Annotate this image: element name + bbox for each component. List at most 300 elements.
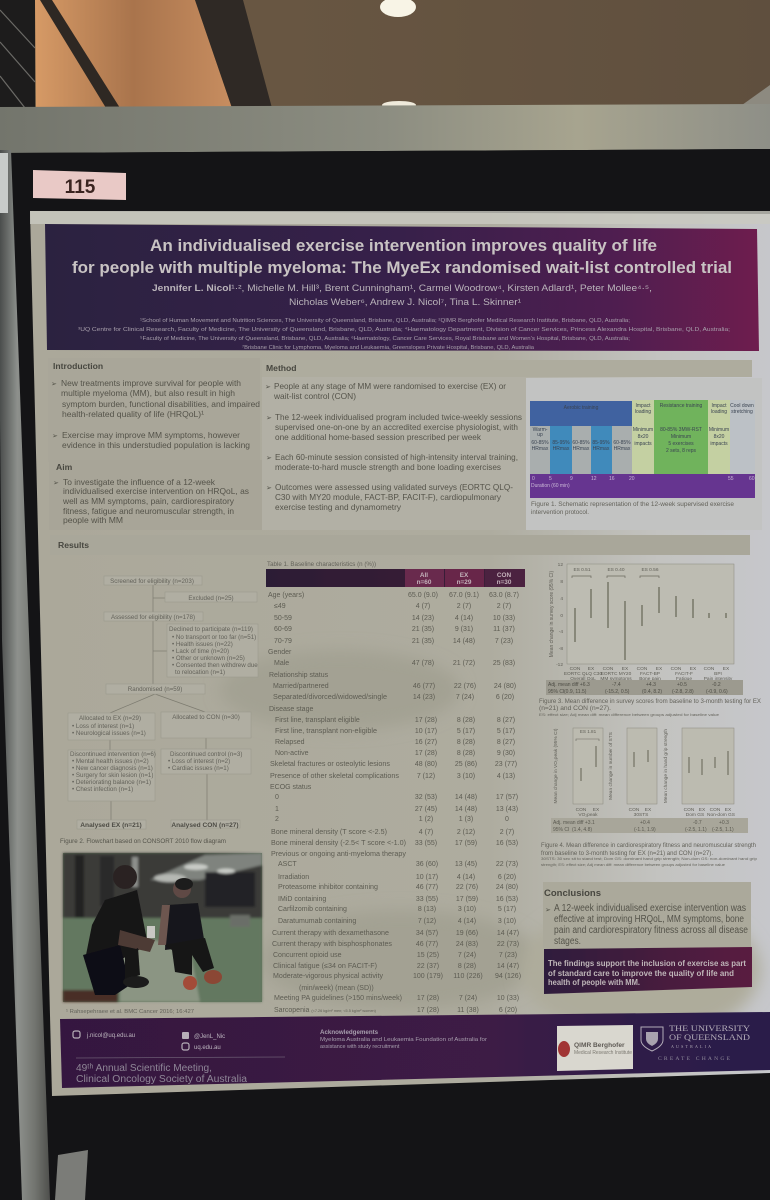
figure 3 caption bbox=[539, 698, 761, 717]
table rows: demographics and disease: Age (years) bbox=[268, 592, 304, 599]
figure 3 adjusted mean table: (0.4, 8.2) bbox=[642, 689, 662, 695]
footer banner bbox=[60, 1012, 770, 1088]
table rows: demographics and disease: Relapsed bbox=[275, 739, 305, 746]
table rows: status and therapy: 24 (83) bbox=[456, 941, 478, 948]
table rows: status and therapy: 15 (25) bbox=[417, 952, 439, 959]
figure 2: CONSORT flowchart: • Neurological issues (n=1) bbox=[72, 730, 146, 737]
aim text: people with MM bbox=[63, 515, 123, 525]
table rows: status and therapy: 11 (38) bbox=[457, 1007, 479, 1014]
chart: VO2 peak: VO₂peak bbox=[578, 812, 598, 818]
table rows: status and therapy: 14 (48) bbox=[455, 794, 477, 801]
table rows: demographics and disease: 25 (86) bbox=[455, 761, 477, 768]
heading: introduction: Introduction bbox=[53, 361, 103, 371]
authors: Nicholas Weber⁶, Andrew J. Nicol⁷, Tina L. Skinner¹ bbox=[289, 297, 521, 307]
icon: twitter bbox=[182, 1032, 189, 1039]
table rows: demographics and disease: Non-active bbox=[275, 750, 309, 757]
table rows: demographics and disease: 8 (28) bbox=[457, 750, 475, 757]
logo: QIMR Berghofer bbox=[557, 1025, 633, 1071]
panel: aim bbox=[49, 460, 262, 530]
table rows: status and therapy: IMiD containing bbox=[278, 896, 326, 903]
introduction text: evidence in this understudied population is lacking bbox=[62, 440, 250, 450]
figure 3: survey score mean change chart: EX bbox=[723, 666, 730, 672]
chart: VO2 peak: EX bbox=[593, 807, 600, 813]
aim text: To investigate the influence of a 12-week bbox=[63, 477, 216, 487]
table rows: status and therapy: 33 (55) bbox=[415, 840, 437, 847]
figure 1: exercise protocol schematic: Duration (60 min) bbox=[531, 483, 570, 489]
introduction text bbox=[51, 378, 260, 450]
method text: The 12-week individualised program included twice-weekly sessions bbox=[275, 412, 522, 422]
table rows: demographics and disease: 5 (17) bbox=[497, 728, 515, 735]
figure 1: exercise protocol schematic: Minimum bbox=[633, 427, 653, 433]
chart: VO2 peak: Mean change in VO₂peak (95% CI) bbox=[553, 728, 559, 803]
figure 3 adjusted mean table: +0.5 bbox=[677, 682, 687, 688]
y-axis labels: 0 bbox=[560, 613, 563, 619]
introduction text: health-related quality of life (HRQoL)¹ bbox=[62, 409, 204, 419]
authors bbox=[152, 283, 652, 307]
figure 2: CONSORT flowchart: • Surgery for skin lesion (n=1) bbox=[72, 772, 153, 779]
figure 2: CONSORT flowchart: Analysed EX (n=21) bbox=[80, 822, 142, 829]
figure 4 adjusted mean table: +0.3 bbox=[719, 820, 729, 826]
acknowledgements bbox=[320, 1029, 487, 1050]
figure 2: CONSORT flowchart: • Cardiac issues (n=1) bbox=[168, 765, 229, 772]
figure 3: survey score mean change chart: CON bbox=[603, 666, 614, 672]
table rows: demographics and disease: 10 (17) bbox=[415, 728, 437, 735]
figure 3: survey score mean change chart: ES 0.56 bbox=[641, 567, 659, 573]
figure 3: survey score mean change chart: EORTC QLQ C30 bbox=[564, 671, 602, 677]
table rows: demographics and disease: First line, transplant non-eligible bbox=[275, 728, 377, 735]
figure 1: exercise protocol schematic: impacts bbox=[634, 441, 652, 447]
figure 1 caption: intervention protocol. bbox=[531, 509, 589, 516]
table rows: demographics and disease: 22 (76) bbox=[454, 683, 476, 690]
table rows: demographics and disease: 47 (78) bbox=[412, 660, 434, 667]
logo: University of Queensland: CREATE CHANGE bbox=[658, 1056, 731, 1062]
figure 3: survey score mean change chart: CON bbox=[637, 666, 648, 672]
table rows: status and therapy: Current therapy with dexamethasone bbox=[272, 930, 389, 937]
table rows: status and therapy: (min/week) (mean (SD)) bbox=[299, 985, 374, 992]
table rows: status and therapy: Carfilzomib containing bbox=[278, 906, 347, 913]
table header row: CON bbox=[497, 572, 511, 579]
panel: conclusions bbox=[543, 882, 751, 948]
table rows: status and therapy: 17 (59) bbox=[456, 896, 478, 903]
chart: hand grip strength: Dom GS bbox=[686, 812, 704, 818]
table rows: demographics and disease: 65.0 (9.0) bbox=[408, 592, 438, 599]
table rows: status and therapy: 8 (28) bbox=[458, 963, 476, 970]
table rows: demographics and disease: ECOG status bbox=[270, 784, 312, 791]
figure 1: exercise protocol schematic: 80-85% 3MW-RST bbox=[660, 427, 702, 433]
table rows: demographics and disease: 8 (28) bbox=[457, 717, 475, 724]
figure 3 caption: (n=21) and CON (n=27). bbox=[539, 705, 611, 712]
title bbox=[72, 236, 732, 277]
figure 1: exercise protocol schematic: Minimum bbox=[671, 434, 691, 440]
figure 3 adjusted mean table bbox=[546, 680, 743, 695]
section heading: results: Results bbox=[58, 540, 89, 550]
table rows: demographics and disease: 16 (27) bbox=[415, 739, 437, 746]
table rows: demographics and disease: 7 (24) bbox=[456, 694, 474, 701]
figure 1: exercise protocol schematic: Warm- bbox=[533, 427, 548, 433]
conclusions text bbox=[545, 903, 748, 947]
table rows: status and therapy: Bone mineral density (-2.5< T score <-1.0) bbox=[271, 840, 406, 847]
figure 1: exercise protocol schematic: 60 bbox=[749, 476, 755, 482]
figure 1: exercise protocol schematic: loading bbox=[711, 409, 727, 415]
table rows: demographics and disease: 6 (20) bbox=[496, 694, 514, 701]
figure 1: exercise protocol schematic: 16 bbox=[609, 476, 615, 482]
method text: ➢ bbox=[265, 384, 271, 391]
contact: twitter: @JenL_Nic bbox=[194, 1034, 225, 1040]
acknowledgements: Myeloma Australia and Leukaemia Foundation of Australia for bbox=[320, 1037, 487, 1043]
figure 1: exercise protocol schematic: 5 bbox=[549, 476, 552, 482]
table header row: n=29 bbox=[457, 579, 472, 586]
table rows: status and therapy: 34 (57) bbox=[416, 930, 438, 937]
table rows: demographics and disease: Male bbox=[274, 660, 289, 667]
figure 2: CONSORT flowchart: Randomised (n=59) bbox=[128, 686, 182, 693]
chart: hand grip strength: CON bbox=[710, 807, 721, 813]
table rows: status and therapy: Clinical fatigue (≤34 on FACIT-F) bbox=[273, 963, 377, 970]
method text: supervised one-on-one by an accredited exercise physiologist, with bbox=[275, 422, 518, 432]
y-axis labels: 12 bbox=[558, 562, 563, 568]
figure 4 caption: 30STS: 30 sec sit to stand test; Dom GS: dominant hand grip strength; Non-dom GS: non-dominant hand grip bbox=[541, 856, 757, 861]
significance brackets bbox=[572, 576, 659, 578]
table rows: demographics and disease: 24 (80) bbox=[494, 683, 516, 690]
table rows: status and therapy: ASCT bbox=[278, 861, 297, 868]
logo: University of Queensland bbox=[641, 1024, 750, 1062]
method text: Each 60-minute session consisted of high-intensity interval training, bbox=[275, 452, 518, 462]
table rows: demographics and disease: ≤49 bbox=[274, 603, 286, 610]
figure 3 caption: ES: effect size; Adj mean diff: mean difference between groups adjusted for baseline value bbox=[539, 713, 719, 717]
figure 4 adjusted mean table: (-2.5, 1.1) bbox=[685, 827, 707, 833]
table rows: status and therapy: 4 (14) bbox=[458, 918, 476, 925]
figure 2: CONSORT flowchart: • Consented then withdrew due bbox=[172, 662, 258, 669]
figure 1: exercise protocol schematic: HRmax bbox=[532, 446, 549, 452]
table rows: demographics and disease bbox=[268, 592, 519, 791]
figure 1: exercise protocol schematic: 0 bbox=[532, 476, 535, 482]
method text: ➢ bbox=[266, 415, 272, 422]
figure 2: CONSORT flowchart: to relocation (n=1) bbox=[175, 669, 225, 676]
table rows: status and therapy: 22 (76) bbox=[456, 884, 478, 891]
chart: sit to stand: Mean change in number of STS bbox=[608, 732, 614, 800]
table rows: demographics and disease: 4 (7) bbox=[416, 603, 430, 610]
table rows: demographics and disease: 60-69 bbox=[274, 626, 292, 633]
y-axis labels: 4 bbox=[560, 596, 563, 602]
photo: exercise physiologist coaching a participant bbox=[63, 853, 262, 1002]
method text: exercise testing and dynamometry bbox=[275, 502, 402, 512]
figure 1: exercise protocol schematic: 60-85% bbox=[613, 440, 631, 446]
table rows: status and therapy: 0 bbox=[275, 794, 279, 801]
figure 3: survey score mean change chart: EX bbox=[656, 666, 663, 672]
figure 1: exercise protocol schematic bbox=[526, 378, 762, 530]
figure 2: CONSORT flowchart: Discontinued control (n=3) bbox=[170, 751, 242, 758]
figure 4 adjusted mean table: (1.4, 4.8) bbox=[572, 827, 592, 833]
figure 1: exercise protocol schematic: loading bbox=[635, 409, 651, 415]
figure 2: CONSORT flowchart: Allocated to EX (n=29) bbox=[79, 715, 141, 722]
method text: moderate-to-hard muscle strength and bone loading exercises bbox=[275, 462, 501, 472]
figure 1: exercise protocol schematic: 8x20 bbox=[638, 434, 649, 440]
figure 4 caption: strength; ES: effect size; Adj mean diff: mean difference between groups adjusted for baseline value bbox=[541, 862, 725, 867]
chart: VO2 peak bbox=[553, 728, 603, 818]
figure 3: survey score mean change chart: EX bbox=[622, 666, 629, 672]
heading: conclusions: Conclusions bbox=[544, 888, 601, 899]
affiliations bbox=[78, 318, 731, 351]
table rows: status and therapy: 17 (57) bbox=[496, 794, 518, 801]
table rows: status and therapy: Irradiation bbox=[278, 874, 309, 881]
figure 1: exercise protocol schematic: Impact bbox=[711, 403, 727, 409]
table rows: demographics and disease: 4 (14) bbox=[455, 615, 473, 622]
figure 1: exercise protocol schematic: 8x20 bbox=[714, 434, 725, 440]
conclusions text: stages. bbox=[554, 936, 581, 947]
table rows: demographics and disease: 8 (27) bbox=[497, 717, 515, 724]
method text: wait-list control (CON) bbox=[273, 391, 356, 401]
table rows: status and therapy: 19 (66) bbox=[456, 930, 478, 937]
table rows: status and therapy: 7 (24) bbox=[459, 995, 477, 1002]
figure 1: exercise protocol schematic: 9 bbox=[570, 476, 573, 482]
table header row: All bbox=[420, 572, 428, 579]
figure 2: CONSORT flowchart: Assessed for eligibility (n=178) bbox=[111, 614, 195, 621]
figure 3 adjusted mean table: Adj. mean diff +6.3 bbox=[548, 682, 590, 688]
table rows: status and therapy: 17 (28) bbox=[417, 1007, 439, 1014]
figure 2: CONSORT flowchart: Allocated to CON (n=30) bbox=[172, 714, 240, 721]
table rows: status and therapy: Previous or ongoing anti-myeloma therapy bbox=[271, 851, 407, 858]
figure 2: CONSORT flowchart bbox=[60, 576, 258, 845]
figure 1: exercise protocol schematic: HRmax bbox=[553, 446, 570, 452]
affiliations: ¹School of Human Movement and Nutrition Sciences, The University of Queensland, Brisbane, QLD, Australia; ²QIMR Berghofer Medical Research Institute, Brisbane, QLD, Australia; bbox=[140, 318, 631, 324]
introduction text: ➢ bbox=[51, 381, 57, 388]
figure 1: exercise protocol schematic: stretching bbox=[731, 409, 753, 415]
introduction text: New treatments improve survival for people with bbox=[61, 378, 241, 388]
figure 2 caption: Figure 2. Flowchart based on CONSORT 2010 flow diagram bbox=[60, 838, 226, 845]
chart: sit to stand: 30STS bbox=[634, 812, 648, 818]
figure 1: exercise protocol schematic: Resistance training bbox=[660, 403, 702, 409]
contact: website: uq.edu.au bbox=[194, 1045, 221, 1051]
table rows: status and therapy: 22 (37) bbox=[417, 963, 439, 970]
table rows: status and therapy: 10 (17) bbox=[416, 874, 438, 881]
table header row: n=60 bbox=[417, 579, 432, 586]
table rows: status and therapy: 100 (179) bbox=[413, 973, 443, 980]
figure 3: survey score mean change chart: Fatigue bbox=[676, 676, 692, 682]
figure: participant bbox=[158, 878, 222, 990]
x-axis labels: CON bbox=[570, 666, 581, 672]
table rows: demographics and disease: 5 (17) bbox=[457, 728, 475, 735]
table header row: n=30 bbox=[497, 579, 512, 586]
table rows: status and therapy: 1 (2) bbox=[419, 816, 433, 823]
figure 3 adjusted mean table: -0.2 bbox=[712, 682, 721, 688]
table rows: status and therapy: 4 (7) bbox=[419, 829, 433, 836]
icon: web bbox=[182, 1043, 189, 1050]
figure 3: survey score mean change chart: Pain intensity bbox=[704, 676, 733, 682]
logo: QIMR Berghofer: Medical Research Institute bbox=[574, 1050, 632, 1056]
table rows: status and therapy: 2 (7) bbox=[500, 829, 514, 836]
figure 3: survey score mean change chart: FACIT-F bbox=[675, 671, 693, 677]
figure 3: survey score mean change chart: EX bbox=[690, 666, 697, 672]
table rows: demographics and disease: 9 (30) bbox=[497, 750, 515, 757]
figure 3: survey score mean change chart: CON bbox=[704, 666, 715, 672]
chart: sit to stand: EX bbox=[645, 807, 652, 813]
logo: QIMR Berghofer: QIMR Berghofer bbox=[574, 1042, 625, 1049]
figure 2: CONSORT flowchart: Analysed CON (n=27) bbox=[171, 822, 239, 829]
method text: ➢ bbox=[266, 485, 272, 492]
y-axis labels: -8 bbox=[559, 646, 563, 652]
table rows: demographics and disease: 7 (23) bbox=[495, 638, 513, 645]
chart: sit to stand: CON bbox=[629, 807, 640, 813]
method text: Outcomes were assessed using validated surveys (EORTC QLQ- bbox=[275, 482, 513, 492]
y-axis labels bbox=[556, 562, 563, 668]
figure 3: survey score mean change chart: Mean change in survey score (95% CI) bbox=[549, 570, 555, 657]
table rows: demographics and disease: 10 (33) bbox=[493, 615, 515, 622]
table rows: demographics and disease: 2 (7) bbox=[497, 603, 511, 610]
figure 1: exercise protocol schematic: 85-95% bbox=[552, 440, 570, 446]
table rows: demographics and disease: 21 (35) bbox=[412, 638, 434, 645]
method text bbox=[265, 381, 522, 512]
conference name: Clinical Oncology Society of Australia bbox=[76, 1074, 247, 1085]
method text: one additional home-based session prescribed per week bbox=[275, 432, 482, 442]
table rows: demographics and disease: 3 (10) bbox=[457, 773, 475, 780]
title: An individualised exercise intervention improves quality of life bbox=[150, 236, 657, 255]
table rows: status and therapy: 32 (53) bbox=[415, 794, 437, 801]
figure 3: survey score mean change chart: MM symptoms bbox=[600, 676, 632, 682]
table rows: status and therapy: 22 (73) bbox=[496, 861, 518, 868]
panel: method bbox=[262, 360, 752, 530]
table rows: status and therapy: 1 bbox=[275, 806, 279, 813]
conference name bbox=[76, 1063, 247, 1085]
figure 1: exercise protocol schematic: 60-85% bbox=[572, 440, 590, 446]
figure 4 adjusted mean table: (-1.1, 1.9) bbox=[634, 827, 656, 833]
figure 4: fitness and strength charts bbox=[541, 728, 757, 867]
table rows: status and therapy: 33 (55) bbox=[416, 896, 438, 903]
introduction text: Exercise may improve MM symptoms, however bbox=[62, 430, 240, 440]
table rows: status and therapy: 10 (33) bbox=[497, 995, 519, 1002]
figure 2: CONSORT flowchart: • Chest infection (n=1) bbox=[72, 786, 133, 793]
figure 1 caption: Figure 1. Schematic representation of the 12-week supervised exercise bbox=[531, 501, 735, 508]
table caption: Table 1. Baseline characteristics (n (%)) bbox=[267, 561, 376, 568]
affiliations: ⁵Faculty of Medicine, The University of Queensland, Brisbane, QLD, Australia; ⁶Haematology, Cancer Care Services, Royal Brisbane and Women's Hospital, Brisbane, QLD, Australia; bbox=[140, 336, 631, 342]
poster paper sheet bbox=[30, 211, 770, 1096]
table rows: status and therapy: 1 (3) bbox=[459, 816, 473, 823]
table rows: status and therapy: Bone mineral density (T score <-2.5) bbox=[271, 829, 387, 836]
figure 3: survey score mean change chart: ES 0.51 bbox=[573, 567, 591, 573]
table rows: demographics and disease: 9 (31) bbox=[455, 626, 473, 633]
figure 3: survey score mean change chart: CON bbox=[671, 666, 682, 672]
figure 3 adjusted mean table: (0.9, 11.5) bbox=[564, 689, 587, 695]
table rows: status and therapy: 6 (20) bbox=[499, 1007, 517, 1014]
table rows: status and therapy: 4 (14) bbox=[457, 874, 475, 881]
table rows: status and therapy: 6 (20) bbox=[498, 874, 516, 881]
figure 3: survey score mean change chart: EX bbox=[588, 666, 595, 672]
table rows: status and therapy: Daratumumab containing bbox=[278, 918, 356, 925]
table rows: demographics and disease: First line, transplant eligible bbox=[275, 717, 360, 724]
table rows: status and therapy: 46 (77) bbox=[416, 941, 438, 948]
figure 3: survey score mean change chart: BPI bbox=[714, 671, 722, 677]
table rows: status and therapy: 16 (53) bbox=[496, 840, 518, 847]
table rows: status and therapy: 2 bbox=[275, 816, 279, 823]
figure 2: CONSORT flowchart: • Loss of interest (n=1) bbox=[72, 723, 134, 730]
poster number tag bbox=[33, 170, 126, 200]
figure 4 caption bbox=[541, 842, 757, 867]
figure 4 adjusted mean table: (-2.5, 1.1) bbox=[712, 827, 734, 833]
figure 2: CONSORT flowchart: • Lack of time (n=20) bbox=[172, 648, 229, 655]
figure 3: survey score mean change chart: FACT-BP bbox=[640, 671, 660, 677]
table rows: status and therapy: 46 (77) bbox=[416, 884, 438, 891]
figure 4 caption: Figure 4. Mean difference in cardiorespiratory fitness and neuromuscular strength bbox=[541, 842, 757, 849]
table rows: status and therapy: 110 (226) bbox=[453, 973, 483, 980]
confidence interval bars bbox=[575, 582, 726, 660]
method text: C30 with MY20 module, FACT-BP, FACIT-F), cardiopulmonary bbox=[275, 492, 502, 502]
table rows: status and therapy: 13 (45) bbox=[455, 861, 477, 868]
figure 3 adjusted mean table: (-2.8, 2.8) bbox=[672, 689, 694, 695]
figure 1: exercise protocol schematic: HRmax bbox=[593, 446, 610, 452]
figure 2: CONSORT flowchart: Declined to participate (n=119) bbox=[169, 626, 253, 633]
table rows: demographics and disease: 14 (23) bbox=[412, 615, 434, 622]
introduction text: ➢ bbox=[52, 433, 58, 440]
logo: University of Queensland: AUSTRALIA bbox=[671, 1044, 711, 1049]
figure 4 adjusted mean table: 95% CI bbox=[553, 827, 569, 833]
table rows: status and therapy: 5 (17) bbox=[498, 906, 516, 913]
aim text: ➢ bbox=[53, 480, 59, 487]
authors: Jennifer L. Nicol ¹·², Michelle M. Hill³, Brent Cunningham¹, Carmel Woodrow⁴, Kirsten Adlard¹, Peter Mollee⁴·⁵, bbox=[152, 283, 652, 293]
table rows: status and therapy: 7 (24) bbox=[458, 952, 476, 959]
table rows: status and therapy: 17 (59) bbox=[455, 840, 477, 847]
figure 1: exercise protocol schematic: Impact bbox=[635, 403, 651, 409]
figure 1: exercise protocol schematic: HRmax bbox=[573, 446, 590, 452]
table rows: status and therapy: Concurrent opioid use bbox=[273, 952, 342, 959]
panel: introduction bbox=[48, 358, 260, 462]
figure 2: CONSORT flowchart: • New cancer diagnosis (n=1) bbox=[72, 765, 153, 772]
table rows: status and therapy: 16 (53) bbox=[496, 896, 518, 903]
figure 1: exercise protocol schematic: up bbox=[537, 432, 543, 438]
icon: email bbox=[73, 1031, 80, 1038]
table rows: demographics and disease: 70-79 bbox=[274, 638, 292, 645]
aim text: well as MM symptoms, pain, cardiorespiratory bbox=[62, 496, 235, 506]
logo: University of Queensland: OF QUEENSLAND bbox=[669, 1033, 750, 1042]
figure 4 adjusted mean table: +0.4 bbox=[640, 820, 650, 826]
background: room ceiling and wood wall bbox=[0, 0, 770, 110]
logo: University of Queensland: THE UNIVERSITY bbox=[669, 1024, 750, 1033]
table 1: baseline characteristics bbox=[266, 561, 525, 1014]
figure 4 adjusted mean table: -0.7 bbox=[693, 820, 702, 826]
chart: hand grip strength: CON bbox=[684, 807, 695, 813]
table rows: demographics and disease: 8 (27) bbox=[497, 739, 515, 746]
table rows: demographics and disease: 23 (77) bbox=[495, 761, 517, 768]
figure 1: exercise protocol schematic: Minimum bbox=[709, 427, 729, 433]
callout: key message bbox=[544, 947, 752, 994]
table rows: status and therapy: 14 (47) bbox=[497, 963, 519, 970]
figure 3: survey score mean change chart: EORTC MY20 bbox=[601, 671, 632, 677]
table rows: status and therapy: 94 (126) bbox=[495, 973, 521, 980]
header banner bbox=[45, 224, 759, 351]
aim text: fitness, fatigue and neuromuscular strength, in bbox=[63, 506, 234, 516]
acknowledgements: Acknowledgements bbox=[320, 1029, 379, 1036]
table header row bbox=[266, 569, 525, 587]
table rows: demographics and disease: 7 (12) bbox=[417, 773, 435, 780]
figure 3 adjusted mean table: (-0.9, 0.6) bbox=[706, 689, 728, 695]
table rows: status and therapy: 14 (47) bbox=[497, 930, 519, 937]
conference name: 49ᵗʰ Annual Scientific Meeting, bbox=[76, 1063, 212, 1074]
table rows: status and therapy: 3 (10) bbox=[458, 906, 476, 913]
table rows: demographics and disease: Married/partnered bbox=[273, 683, 329, 690]
table rows: status and therapy: 0 bbox=[505, 816, 509, 823]
figure 1: exercise protocol schematic: impacts bbox=[710, 441, 728, 447]
table rows: status and therapy bbox=[271, 794, 521, 1014]
table rows: status and therapy: 7 (12) bbox=[418, 918, 436, 925]
method text: ➢ bbox=[266, 455, 272, 462]
y-axis labels: 8 bbox=[560, 579, 563, 585]
title: for people with multiple myeloma: The MyeEx randomised wait-list controlled trial bbox=[72, 258, 732, 277]
figure 2: CONSORT flowchart: • Loss of interest (n=2) bbox=[168, 758, 230, 765]
figure 3: survey score mean change chart: Overall QoL bbox=[570, 676, 596, 682]
figure 4 caption: from baseline to 3-month testing for EX (n=21) and CON (n=27). bbox=[541, 850, 713, 857]
table header row: EX bbox=[460, 572, 469, 579]
callout: key message: health of people with MM. bbox=[548, 978, 640, 987]
table rows: status and therapy: 13 (43) bbox=[496, 806, 518, 813]
table rows: status and therapy: Proteasome inhibitor containing bbox=[278, 884, 378, 891]
table rows: demographics and disease: 25 (83) bbox=[493, 660, 515, 667]
